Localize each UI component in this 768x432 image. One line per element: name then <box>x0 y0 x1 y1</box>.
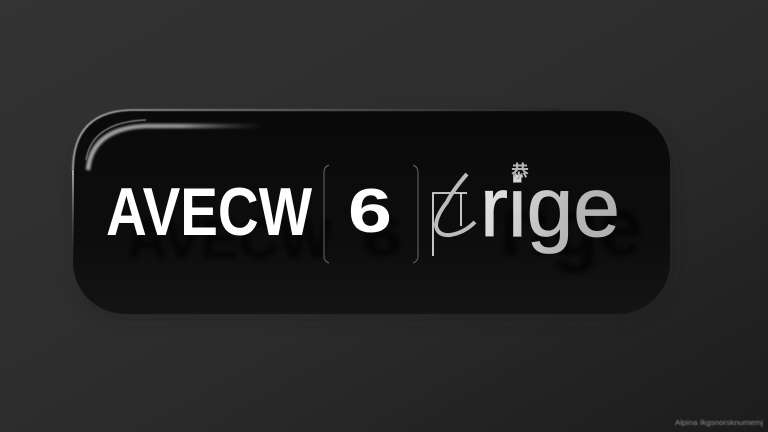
reflection text: AVECW <box>127 207 332 270</box>
pill top rim highlight <box>73 110 560 170</box>
panel: glossy black pill <box>72 110 670 314</box>
reflection text: 6 <box>362 205 402 268</box>
pill thin gloss line <box>86 120 146 160</box>
left bracket <box>324 165 329 263</box>
right bracket <box>413 165 418 263</box>
pill left rim highlight <box>72 170 74 265</box>
pill shadow <box>76 120 672 318</box>
brand word: AVECW: AVECW <box>106 174 313 250</box>
reflection text: rige <box>500 180 642 274</box>
reflection text <box>127 180 642 274</box>
pill inner gloss highlight <box>88 126 262 170</box>
word: rige: rige <box>480 160 620 254</box>
icon: pen stroke glyph <box>433 174 475 256</box>
icon: small emblem: 恭 <box>511 162 529 182</box>
numeral 6: 6 <box>348 177 392 246</box>
footer caption: Alpina Ikgsnorsknumemj <box>675 418 763 427</box>
